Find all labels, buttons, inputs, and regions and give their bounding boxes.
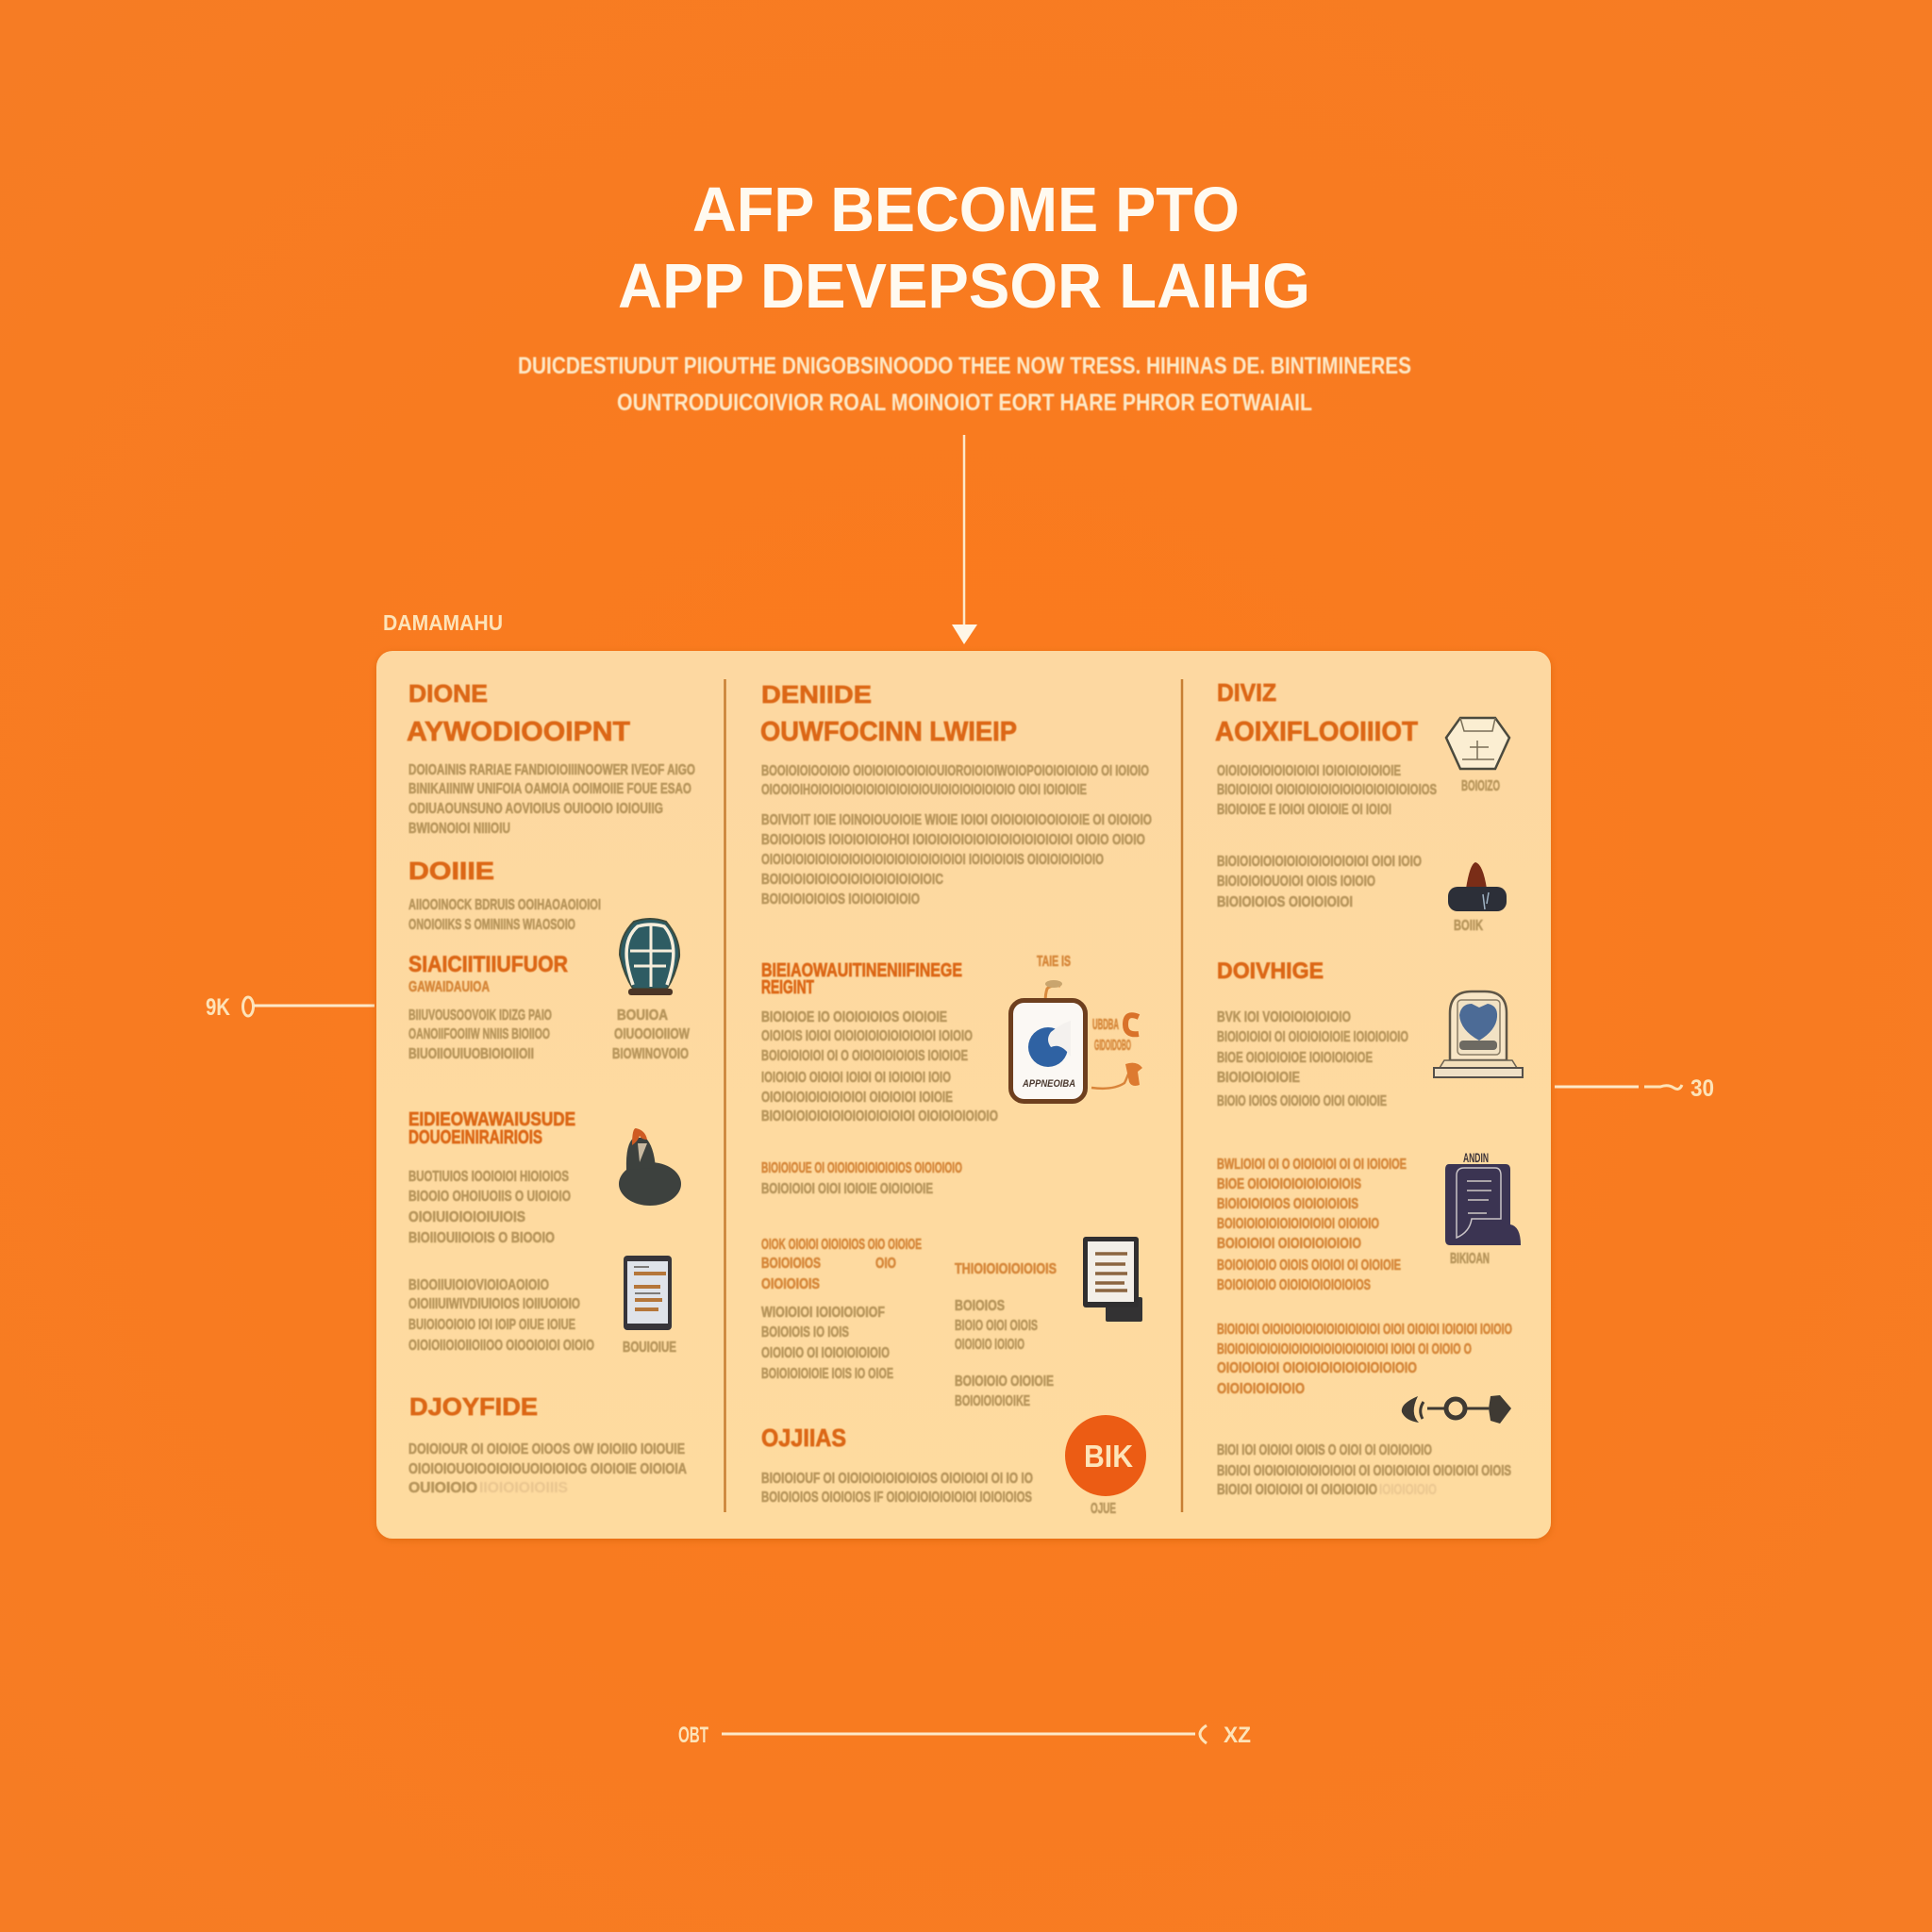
text block: center bottom — [761, 1471, 1033, 1506]
text block: right third: BIOIOIOIOI OI OIOIOIOIOIE IOIOIOIOIO — [1217, 1029, 1408, 1045]
icon caption: phone top: TAIE IS — [1037, 954, 1071, 970]
text block: center third: OIOIOIOIOIOIOIOIOI OIOIOIOI IOIOIE — [761, 1090, 953, 1106]
text block: right third: BVK IOI VOIOIOIOIOIOIO — [1217, 1009, 1351, 1025]
callout: right: 30 — [1690, 1075, 1714, 1102]
text block: left fifth: OIOIOIIOIOIIOIIOO OIOOIOIOI OIOIO — [408, 1338, 594, 1354]
icon: monument display — [1434, 991, 1523, 1077]
heading: right top: AOIXIFLOOIIIOT — [1215, 717, 1418, 747]
icon: dark hat — [1448, 862, 1507, 911]
badge caption: OJUE — [1091, 1501, 1116, 1517]
text block: right fourth: BOIOIOIOI OIOIOIOIOIOIO — [1217, 1236, 1361, 1252]
heading: left third: GAWAIDAUIOA — [408, 979, 490, 995]
text block: right bottom — [1217, 1442, 1511, 1498]
text block: left fifth: OIOIIIUIWIVDIUIOIOS IOIIUOIOIO — [408, 1296, 580, 1312]
text block: center sixth: BIOIO OIOI OIOIS — [955, 1318, 1038, 1334]
text block: left intro: BINIKAIINIW UNIFOIA OAMOIA OOIMOIIE FOUE ESAO — [408, 781, 691, 797]
text block: center intro: BOOIOIOIOOIOIO OIOIOIOIOOIOIOUIOROIOIOIWOIOPOIOIOIOIOIO OI IOIOIO — [761, 763, 1149, 779]
icon: dark terminal — [1445, 1164, 1521, 1245]
callout: bottom: OBT — [678, 1723, 708, 1748]
icon caption: bulb: BOUIOA — [617, 1008, 668, 1024]
title: APP DEVEPSOR LAIHG — [618, 251, 1310, 322]
text block: left bottom: OIOIOIOUOIOOIOIOUOIOIOIOG OIOIOIE OIOIOIA — [408, 1461, 687, 1477]
text block: center third: IOIOIOIO OIOIOI IOIOI OI IOIOIOI IOIO — [761, 1070, 951, 1086]
text block: center sixth: BOIOIOIOIOIKE — [955, 1393, 1030, 1409]
text block: right third: BIOE OIOIOIOIOE IOIOIOIOIOE — [1217, 1050, 1373, 1066]
text block: center fifth: BOIOIOIS IO IOIS — [761, 1324, 849, 1341]
text block: left intro: ODIUAOUNSUNO AOVIOIUS OUIOOIO IOIOUIIG — [408, 801, 663, 817]
icon: phone side connectors — [1091, 1015, 1142, 1089]
text block: left third: OANOIIFOOIIW NNIIS BIOIIOO — [408, 1026, 550, 1042]
text block: center third: BIOIOIOIOIOIOIOIOIOIOIOIOI OIOIOIOIOIOIO — [761, 1108, 998, 1124]
heading: left top: AYWODIOOIPNT — [407, 717, 630, 747]
icon: app card — [1011, 980, 1085, 1102]
heading: left fourth: DOUOEINIRAIRIOIS — [408, 1127, 542, 1148]
text block: left third: BIUOIIOUIUOBIOIOIIOII — [408, 1046, 534, 1062]
panel: left column — [407, 679, 695, 1496]
text block: center third: BOIOIOIOIOI OI O OIOIOIOIOIOIS IOIOIOE — [761, 1048, 968, 1064]
callout: bottom — [678, 1723, 1251, 1748]
icon: phone side connectors: UBDBA — [1092, 1017, 1119, 1033]
text block: left fourth: OIOIUIOIOIOIUIOIS — [408, 1209, 525, 1225]
text block: right fourth: BOIOIOIOIOIOIOIOIOIOI OIOIOIO — [1217, 1216, 1379, 1232]
panel: right column — [1215, 678, 1523, 1498]
heading: center top: DENIIDE — [761, 680, 872, 708]
text block: right fifth: BIOIOIOIOIOIOIOIOIOIOIOIOIOIOIOI IOIOI OI OIOIO O — [1217, 1341, 1472, 1357]
text block: left second — [408, 897, 601, 933]
callout: left — [206, 994, 375, 1021]
text block: center fourth: BIOIOIOUE OI OIOIOIOIOIOIOIOS OIOIOIOIO — [761, 1160, 962, 1176]
text block: center intro: OIOOIOIHOIOIOIOIOIOIOIOIOIOIOUIOIOIOIOIOIOIO OIOI IOIOIOIE — [761, 782, 1087, 798]
text block: center fifth: OIOIOIO OI IOIOIOIOIOIO — [761, 1345, 890, 1361]
panel: center column — [760, 680, 1152, 1517]
text block: left second: ONOIOIIKS S OMINIINS WIAOSOIO — [408, 917, 575, 933]
heading: left fifth: DJOYFIDE — [409, 1392, 538, 1421]
text block: center sixth: BOIOIOIO OIOIOIE — [955, 1374, 1054, 1390]
text block: right bottom: BIOI IOI OIOIOI OIOIS O OIOI OI OIOIOIOIO — [1217, 1442, 1432, 1458]
heading: right top — [1215, 678, 1418, 747]
icon caption: bulb: BIOWINOVOIO — [612, 1046, 689, 1062]
text block: center fourth — [761, 1160, 962, 1197]
text block: right fourth: BWLIOIOI OI O OIOIOIOI OI OI IOIOIOE — [1217, 1157, 1407, 1173]
text block: right intro: OIOIOIOIOIOIOIOIOI IOIOIOIOIOIOIE — [1217, 763, 1401, 779]
text block: left bottom — [408, 1441, 687, 1496]
text block: center sixth: OIOIOIO IOIOIO — [955, 1337, 1024, 1353]
text block: center bottom: BOIOIOIOS OIOIOIOS IF OIOIOIOIOIOIOIOI IOIOIOIOS — [761, 1490, 1032, 1506]
icon caption: terminal top: ANDIN — [1463, 1150, 1489, 1165]
text block: right intro: BIOIOIOIOI OIOIOIOIOIOIOIOIOIOIOIOIOIOS — [1217, 782, 1437, 798]
text block: right second: BIOIOIOIOIOIOIOIOIOIOIOIOI OIOI IOIO — [1217, 854, 1422, 870]
icon: dark figure bag — [619, 1128, 681, 1206]
main panel — [376, 651, 1551, 1539]
badge: orange circle — [1065, 1415, 1146, 1496]
text block: left third: BIIUVOUSOOVOIK IDIZG PAIO — [408, 1008, 552, 1024]
title — [618, 175, 1310, 322]
heading: left second: DOIIIE — [408, 857, 494, 885]
callout: left: 9K — [206, 994, 230, 1021]
text block: center fifth: OIOK OIOIOI OIOIOIOS OIO OIOIOE — [761, 1237, 922, 1253]
text block: center fifth: WIOIOIOI IOIOIOIOIOF — [761, 1305, 885, 1321]
text block: center sixth — [955, 1261, 1057, 1409]
text block: right bottom: BIOIOI OIOIOIOI OI OIOIOIOIO — [1217, 1482, 1377, 1498]
text block: right intro — [1217, 763, 1437, 818]
icon: hexagon box — [1446, 718, 1509, 769]
text block: left fourth: BUOTIUIOS IOOIOIOI HIOIOIOS — [408, 1169, 569, 1185]
text block: left fourth — [408, 1169, 571, 1246]
badge: orange circle: BIK — [1084, 1439, 1133, 1474]
text block: left third — [408, 1008, 552, 1062]
callout: right — [1555, 1075, 1714, 1102]
text block: center third: OIOIOIS IOIOI OIOIOIOIOIOIOIOIOI IOIOIO — [761, 1028, 973, 1044]
text block: right second: BIOIOIOIOS OIOIOIOIOI — [1217, 894, 1353, 910]
text block: right third: BIOIOIOIOIOIE — [1217, 1070, 1300, 1086]
text block: center fifth — [761, 1237, 922, 1382]
text block: right third — [1217, 1009, 1408, 1109]
heading: left third — [408, 952, 568, 995]
text block: right fourth: BOIOIOIOIO OIOIOIOIOIOIOIOS — [1217, 1277, 1371, 1293]
icon: app card: APPNEOIBA — [1022, 1078, 1075, 1090]
text block: left fifth: BUIOIOOIOIO IOI IOIP OIUE IOIUE — [408, 1317, 575, 1333]
heading: left third: SIAICIITIIUFUOR — [408, 952, 568, 977]
heading: left top — [407, 679, 630, 747]
text block: center third — [761, 1009, 998, 1124]
text block: center second: BOIOIOIOIOIOOIOIOIOIOIOIOIOIC — [761, 872, 943, 888]
text block: right fifth: OIOIOIOIOI OIOIOIOIOIOIOIOIOIOIO — [1217, 1360, 1417, 1376]
panel label: DAMAMAHU — [383, 610, 503, 635]
text block: left bottom: DOIOIOUR OI OIOIOE OIOOS OW IOIOIIO IOIOUIE — [408, 1441, 685, 1457]
text block: left fourth: BIOOIO OHOIUOIIS O UIOIOIO — [408, 1189, 571, 1205]
subtitle: OUNTRODUICOIVIOR ROAL MOINOIOT EORT HARE PHROR EOTWAIAIL — [617, 390, 1312, 416]
heading: right third: DOIVHIGE — [1217, 958, 1324, 984]
text block: center fourth: BOIOIOIOI OIOI IOIOIE OIOIOIOIE — [761, 1181, 933, 1197]
text block: center second: BOIOIOIOIS IOIOIOIOIOHOI IOIOIOIOIOIOIOIOIOIOIOIOIOI OIOIO OIOIO — [761, 832, 1145, 848]
column divider right — [1181, 679, 1183, 1512]
text block: right intro: BIOIOIOE E IOIOI OIOIOIE OI IOIOI — [1217, 802, 1391, 818]
text block: right fifth: OIOIOIOIOIOIO — [1217, 1381, 1305, 1397]
text block: left intro: BWIONOIOI NIIIOIU — [408, 821, 510, 837]
heading: center bottom: OJJIIAS — [761, 1424, 846, 1452]
icon caption: hexagon: BOIOIZO — [1461, 778, 1500, 794]
icon caption: bulb — [612, 1008, 690, 1062]
text block: left bottom: IIOIOIOIOIIIS — [479, 1480, 568, 1496]
callout: bottom: XZ — [1224, 1723, 1251, 1748]
heading: center third — [761, 960, 962, 998]
subtitle — [518, 353, 1411, 416]
text block: center second — [761, 812, 1152, 908]
text block: center sixth: THIOIOIOIOIOIOIS — [955, 1261, 1057, 1277]
title: AFP BECOME PTO — [692, 175, 1240, 245]
text block: center sixth: BOIOIOS — [955, 1298, 1005, 1314]
text block: center second: BOIVIOIT IOIE IOINOIOUOIOIE WIOIE IOIOI OIOIOIOIOOIOIOIE OI OIOIOIO — [761, 812, 1152, 828]
text block: right fourth: BOIOIOIOIO OIOIS OIOIOI OI OIOIOIE — [1217, 1257, 1401, 1274]
arrow: down to panel — [952, 435, 977, 644]
text block: left second: AIIOOINOCK BDRUIS OOIHAOAOIOIOI — [408, 897, 601, 913]
heading: center top: OUWFOCINN LWIEIP — [760, 717, 1017, 747]
text block: center third: BIOIOIOE IO OIOIOIOIOS OIOIOIE — [761, 1009, 947, 1025]
text block: left intro — [408, 762, 695, 837]
text block: center fifth: BOIOIOIOIOIE IOIS IO OIOE — [761, 1366, 893, 1382]
text block: right third: BIOIO IOIOS OIOIOIO OIOI OIOIOIE — [1217, 1093, 1387, 1109]
icon: e-reader — [1083, 1237, 1142, 1322]
heading: center third: REIGINT — [761, 977, 814, 998]
column divider left — [724, 679, 726, 1512]
text block: right fifth — [1217, 1322, 1512, 1397]
heading: center third: BIEIAOWAUITINENIIFINEGE — [761, 960, 962, 981]
heading: left fourth — [408, 1109, 575, 1148]
text block: right bottom: BIOIOI OIOIOIOIOIOIOIOIOI OI OIOIOIOIOI OIOIOIOI OIOIS — [1217, 1463, 1511, 1479]
text block: center intro — [761, 763, 1149, 798]
icon: glass bulb — [620, 919, 679, 995]
text block: right second — [1217, 854, 1422, 910]
text block: right fourth: BIOE OIOIOIOIOIOIOIOIOIS — [1217, 1176, 1361, 1192]
text block: right second: BIOIOIOIOUOIOI OIOIS IOIOIO — [1217, 874, 1375, 890]
text block: center fifth: BOIOIOIOS — [761, 1256, 821, 1272]
icon: tablet — [624, 1256, 672, 1330]
heading: center top — [760, 680, 1017, 747]
text block: center second: BOIOIOIOIOIOS IOIOIOIOIOIO — [761, 891, 920, 908]
text block: center bottom: BIOIOIOUF OI OIOIOIOIOIOIOIOS OIOIOIOI OI IO IO — [761, 1471, 1033, 1487]
text block: left fifth — [408, 1277, 594, 1354]
subtitle: DUICDESTIUDUT PIIOUTHE DNIGOBSINOODO THEE NOW TRESS. HIHINAS DE. BINTIMINERES — [518, 353, 1411, 379]
text block: left bottom: OUIOIOIO — [408, 1480, 477, 1496]
icon caption: hat: BOIIK — [1454, 918, 1484, 934]
heading: left fourth: EIDIEOWAWAIUSUDE — [408, 1109, 575, 1130]
heading: right top: DIVIZ — [1217, 678, 1276, 707]
text block: right fourth: BIOIOIOIOIOS OIOIOIOIOIS — [1217, 1196, 1358, 1212]
text block: right bottom: IOIOIOIOIO — [1379, 1482, 1437, 1498]
text block: right fifth: BIOIOIOI OIOIOIOIOIOIOIOIOIOIOI OIOI OIOIOI IOIOIOI IOIOIO — [1217, 1322, 1512, 1338]
icon caption: tablet: BOUIOIUE — [623, 1340, 676, 1356]
text block: center fifth: OIO — [875, 1256, 896, 1272]
icon: phone side connectors: GIDOIDOBO — [1094, 1038, 1131, 1054]
text block: center second: OIOIOIOIOIOIOIOIOIOIOIOIOIOIOIOIOIOI IOIOIOIOIS OIOIOIOIOIOIO — [761, 852, 1104, 868]
icon caption: bulb: OIUOOIOIIOW — [614, 1026, 690, 1042]
icon caption: terminal: BIKIOAN — [1450, 1251, 1490, 1267]
text block: left fifth: BIOOIIUIOIOVIOIOAOIOIO — [408, 1277, 549, 1293]
text block: left fourth: BIOIIOUIIOIOIS O BIOOIO — [408, 1230, 555, 1246]
icon: connector — [1402, 1395, 1511, 1424]
text block: left intro: DOIOAINIS RARIAE FANDIOIOIIINOOWER IVEOF AIGO — [408, 762, 695, 778]
text block: right fourth — [1217, 1157, 1407, 1293]
heading: left top: DIONE — [408, 679, 488, 708]
text block: center fifth: OIOIOIOIS — [761, 1276, 820, 1292]
